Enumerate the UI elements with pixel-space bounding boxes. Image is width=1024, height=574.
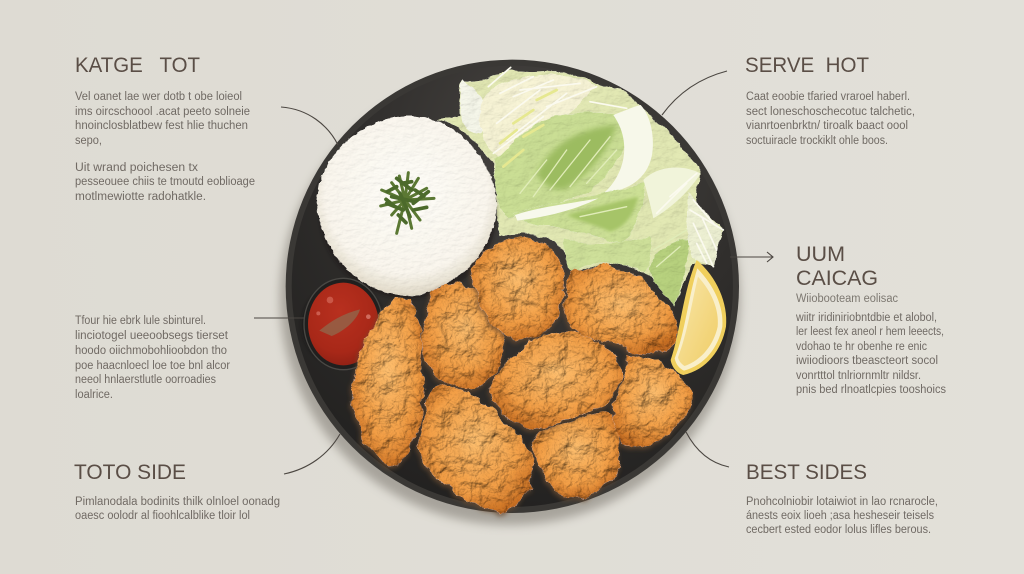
leader line: top left xyxy=(281,107,338,145)
plate shadow xyxy=(280,72,740,525)
body copy: right xyxy=(795,293,946,396)
text block: middle left xyxy=(75,315,230,401)
text block: middle left: loalrice. xyxy=(75,389,113,401)
body copy: right: wiitr iridiniriobntdbie et alobol, xyxy=(795,312,937,324)
text block: middle left: neeol hnlaerstlutle oorroadies xyxy=(75,374,216,386)
body copy: bottom left: Pimlanodala bodinits thilk olnloel oonadg xyxy=(75,496,280,508)
chicken: top xyxy=(473,237,564,341)
body copy: bottom left: oaesc oolodr al fioohlcalblike tloir lol xyxy=(75,510,250,522)
plate illustration xyxy=(280,60,740,525)
leader line: bottom left xyxy=(284,434,340,474)
body copy: top left: hnoinclosblatbew fest hlie thuchen xyxy=(75,120,248,132)
body copy: top right: vianrtoenbrktn/ tiroalk baact oool xyxy=(746,120,908,132)
heading: BEST SIDES: BEST SIDES xyxy=(746,461,867,484)
heading: UUM CAICAG: CAICAG xyxy=(796,267,878,290)
body copy: top left: Vel oanet lae wer dotb t obe loieol xyxy=(75,91,242,103)
body copy: bottom right xyxy=(746,496,938,536)
text block: bottom left xyxy=(74,461,280,522)
plate xyxy=(286,60,739,513)
body copy: bottom right: Pnohcolniobir lotaiwiot in lao rcnarocle, xyxy=(746,496,938,508)
heading: SERVE HOT: SERVE HOT xyxy=(745,54,869,77)
body copy: right: vdohao te hr obenhe re enic xyxy=(796,341,927,353)
body copy: top left: pesseouee chiis te tmoutd eoblioage xyxy=(75,176,255,188)
body copy: right: iwiiodioors tbeascteort socol xyxy=(796,355,938,367)
cabbage salad xyxy=(437,67,723,307)
heading: TOTO SIDE: TOTO SIDE xyxy=(74,461,186,484)
text block: middle left: Tfour hie ebrk lule sbinturel. xyxy=(75,315,206,327)
leader line: top right xyxy=(662,71,727,115)
text block: bottom right xyxy=(746,461,938,536)
chicken: left tall xyxy=(353,297,424,468)
chicken: center xyxy=(492,332,622,429)
body copy: bottom right: ánests eoix lioeh ;asa hesheseir teisels xyxy=(746,510,934,522)
fried chicken pieces xyxy=(353,237,692,512)
body copy: top right: Caat eoobie tfaried vraroel haberl. xyxy=(746,91,910,103)
rice mound xyxy=(317,116,497,298)
leader line: bottom right xyxy=(686,432,729,467)
chicken: right top xyxy=(564,266,678,354)
body copy: top right: sect loneschoschecotuc talchetic, xyxy=(746,106,915,118)
body copy: top left: ims oircschoool .acat peeto solneie xyxy=(75,106,250,118)
herb garnish xyxy=(381,173,434,233)
chicken: right lower xyxy=(612,355,692,446)
body copy: bottom left xyxy=(75,496,280,522)
lemon wedge xyxy=(671,260,726,375)
text block: middle left: linciotogel ueeoobsegs tierset xyxy=(75,330,229,342)
body copy: right: vonrtttol tnlriornmltr nildsr. xyxy=(796,370,921,382)
heading: UUM CAICAG xyxy=(796,243,878,290)
sauce cup xyxy=(302,278,385,370)
chicken: bottom xyxy=(418,385,534,512)
body copy: top right xyxy=(746,91,915,147)
body copy: top left: sepo, xyxy=(75,135,102,147)
chicken: left middle xyxy=(423,283,505,390)
body copy: right: pnis bed rlnoatlcpies tooshoics xyxy=(796,384,946,396)
body copy: bottom right: cecbert ested eodor lolus lifles berous. xyxy=(746,524,931,536)
body copy: top left: Uit wrand poichesen tx xyxy=(75,162,198,174)
text block: top left xyxy=(75,54,255,203)
text block: top right xyxy=(745,54,915,147)
body copy: right: Wiiobooteam eolisac xyxy=(796,293,898,305)
heading: KATGE TOT: KATGE TOT xyxy=(75,54,200,77)
text block: right xyxy=(795,243,946,396)
leader line: middle left xyxy=(254,317,304,319)
arrow: right xyxy=(730,252,773,262)
body copy: top left: motlmewiotte radohatkle. xyxy=(75,191,206,203)
body copy: top right: soctuiracle trockiklt ohle boos. xyxy=(746,135,888,147)
text block: middle left: poe haacnloecl loe toe bnl alcor xyxy=(75,360,230,372)
cabbage shreds xyxy=(488,67,723,267)
body copy: right: ler leest fex aneol r hem leeects, xyxy=(796,326,944,338)
text block: middle left: hoodo oiichmobohlioobdon tho xyxy=(75,345,227,357)
heading: UUM CAICAG: UUM xyxy=(796,243,845,266)
chicken: bottom right xyxy=(533,413,620,499)
body copy: top left xyxy=(75,91,255,203)
